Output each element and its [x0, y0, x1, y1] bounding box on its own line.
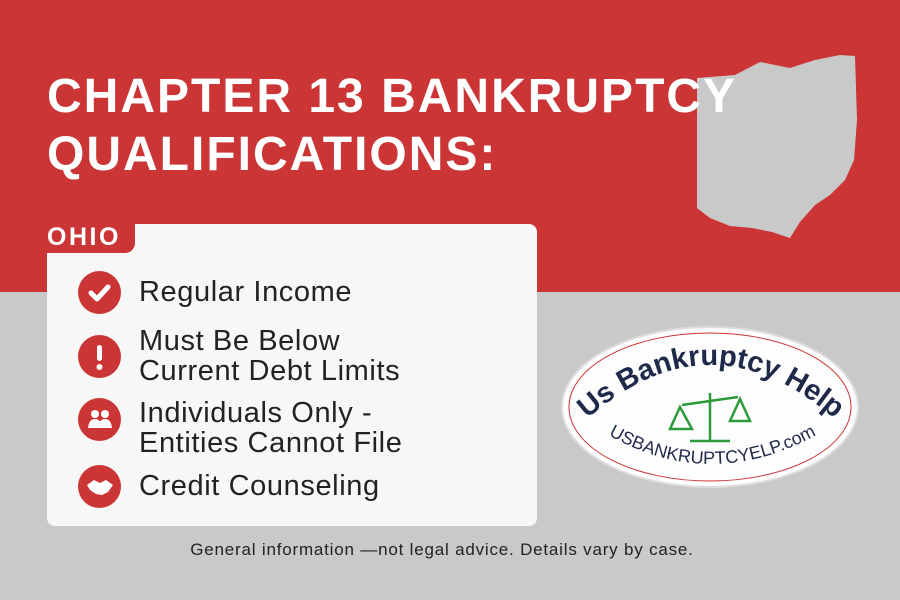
text: Regular Income [139, 276, 352, 308]
icon: check [78, 271, 121, 314]
text [139, 397, 402, 459]
logo badge [561, 326, 859, 488]
text: Entities Cannot File [139, 427, 402, 459]
item: regular income [78, 271, 352, 314]
text: Individuals Only - [139, 397, 372, 429]
icon: people [78, 398, 121, 441]
text: Current Debt Limits [139, 355, 400, 387]
title [47, 70, 737, 181]
card panel [47, 224, 537, 526]
item: individuals [78, 397, 402, 459]
text: Must Be Below [139, 325, 340, 357]
icon: exclamation [78, 335, 121, 378]
item: debt limits [78, 325, 400, 387]
icon: handshake [78, 465, 121, 508]
footer disclaimer: General information —not legal advice. Details vary by case. [190, 540, 694, 559]
OHIO tab: OHIO [47, 223, 121, 251]
logo url: USBANKRUPTCYELP.com [611, 424, 816, 464]
text [139, 325, 400, 387]
item: credit counseling [78, 465, 380, 508]
icon: scales [670, 393, 750, 441]
text: Credit Counseling [139, 470, 380, 502]
icon: Ohio map [697, 55, 857, 238]
title: QUALIFICATIONS: [47, 128, 497, 181]
logo heading: Us Bankruptcy Help [576, 348, 842, 416]
title: CHAPTER 13 BANKRUPTCY [47, 70, 737, 123]
